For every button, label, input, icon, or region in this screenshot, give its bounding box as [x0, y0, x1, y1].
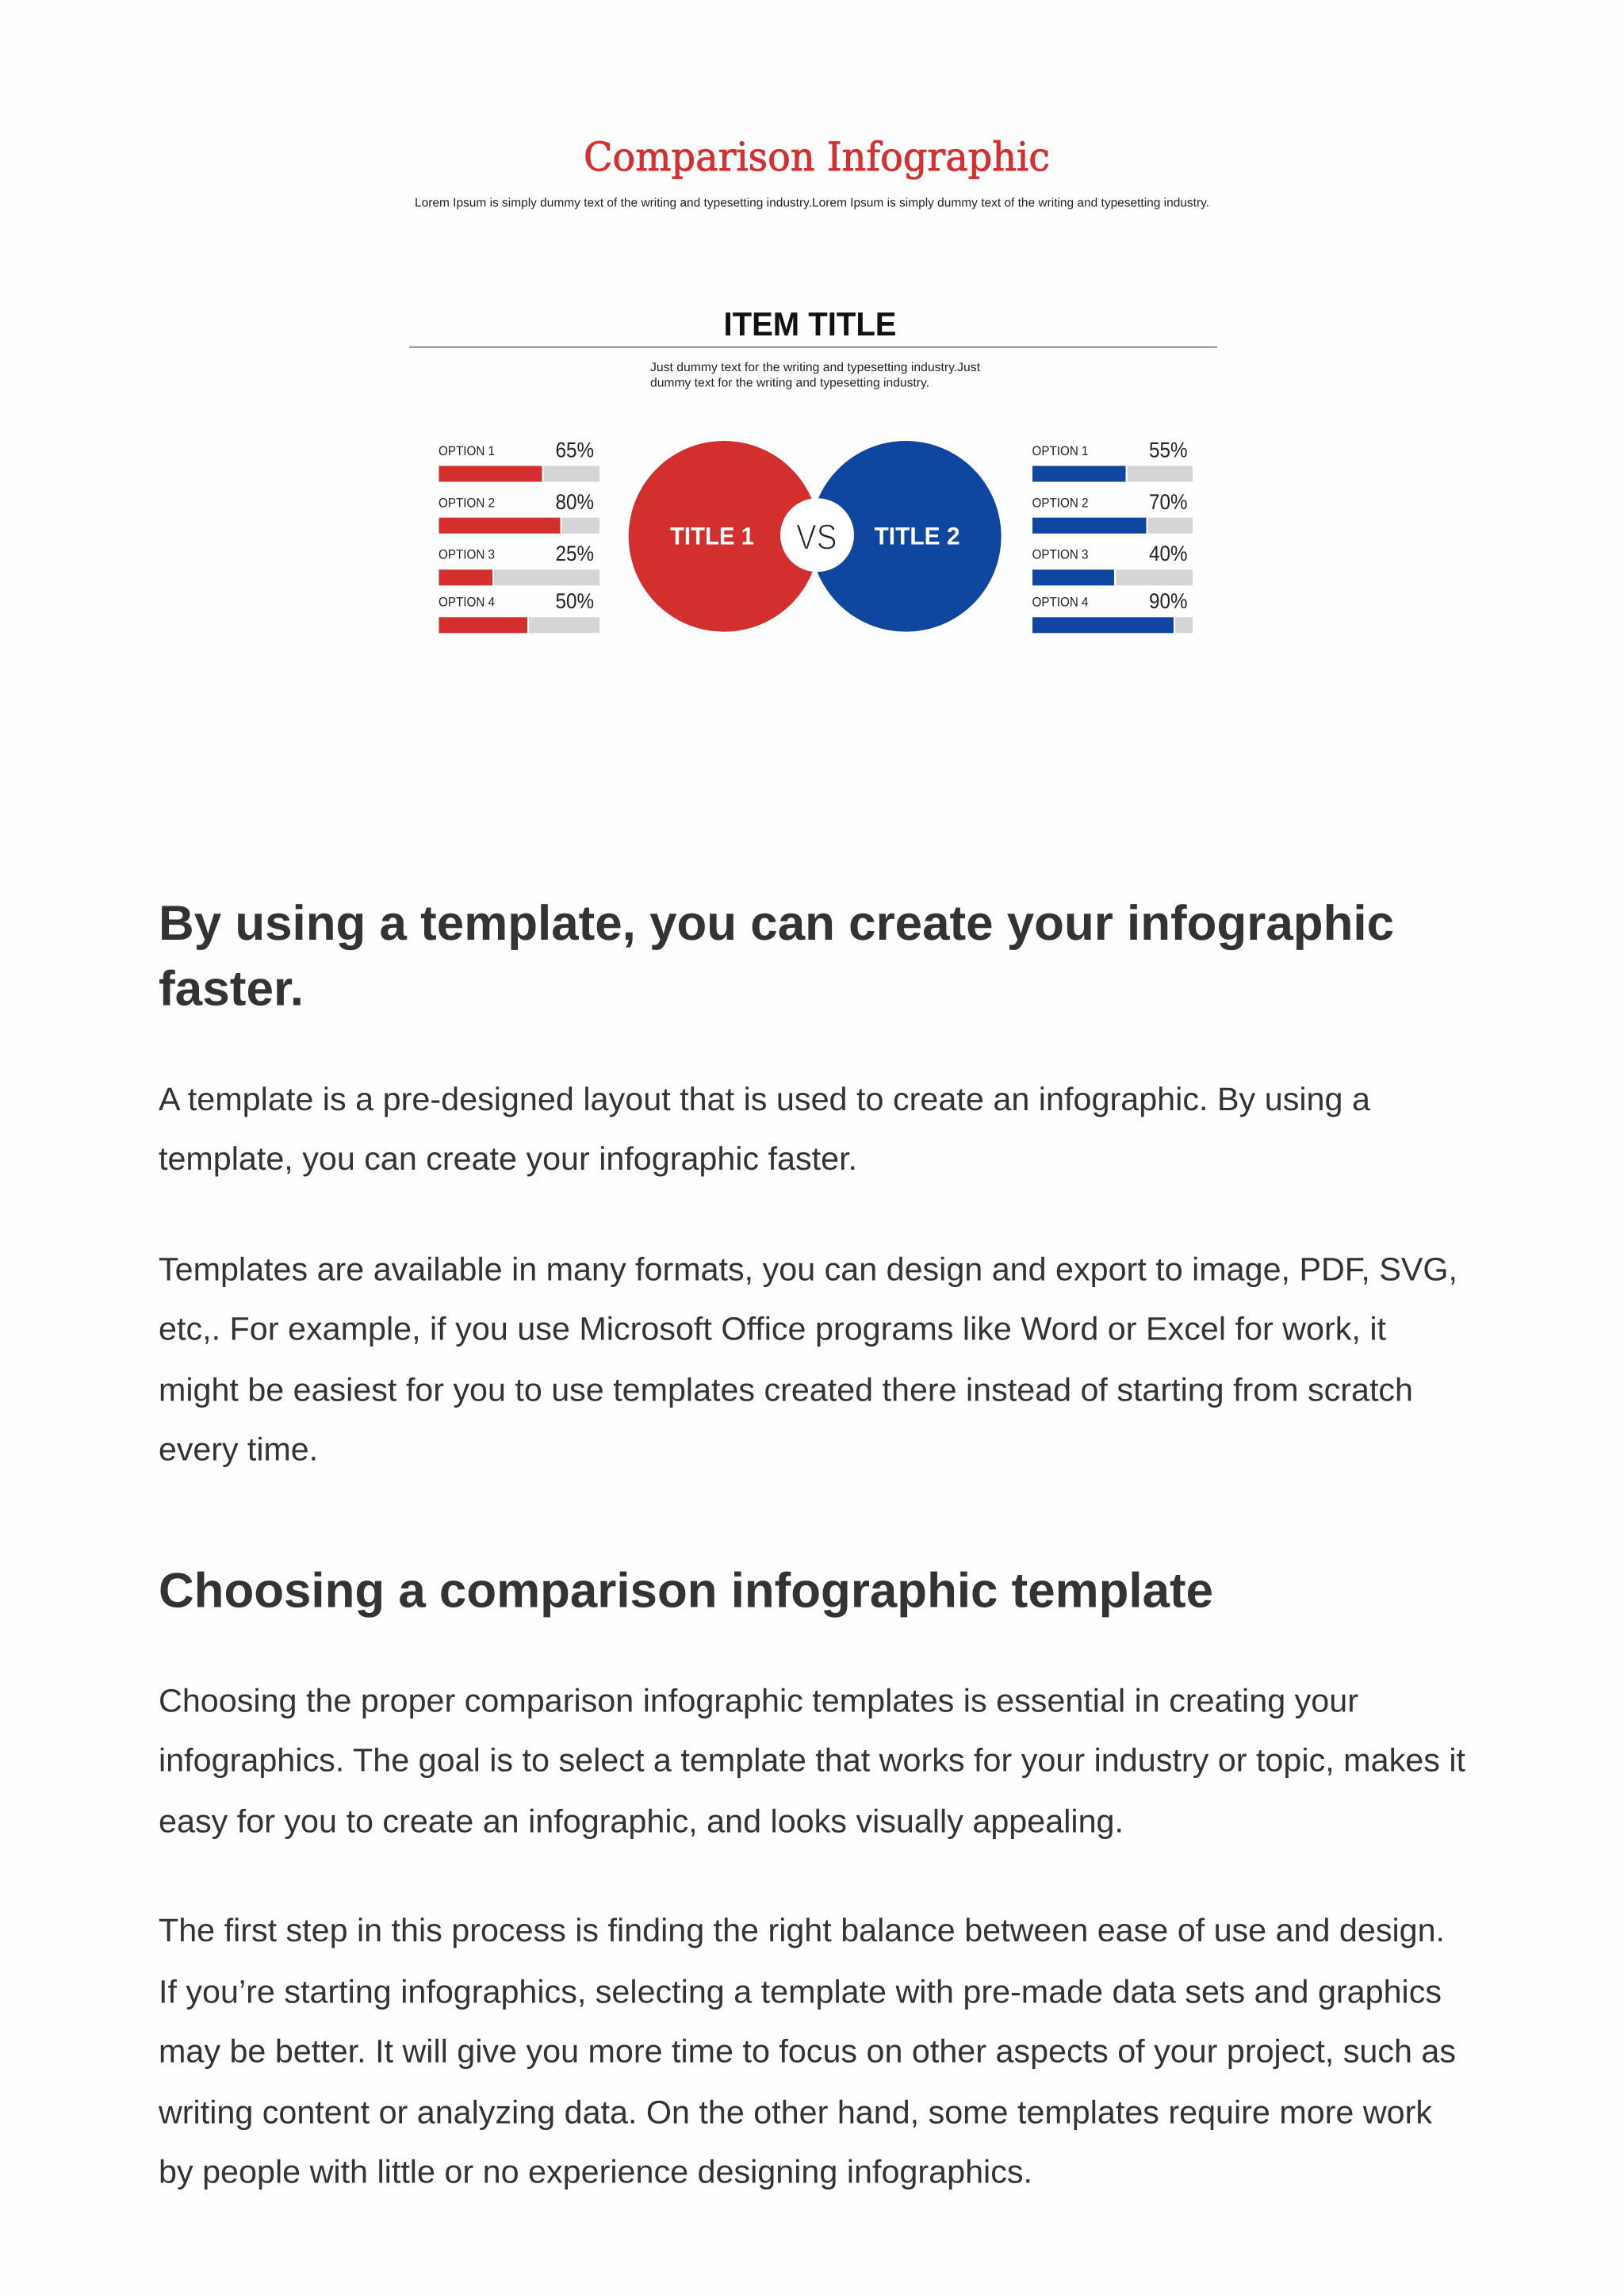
blue circle — [810, 441, 1002, 632]
right option 4: OPTION 4 — [1032, 596, 1088, 610]
paragraph: first step: If you’re starting infographics, selecting a template with pre-made data sets and graphics — [159, 1974, 1442, 2010]
right option 3 — [1032, 542, 1193, 585]
item title rule — [409, 346, 1217, 348]
paragraph: template formats: Templates are available in many formats, you can design and export to image, PDF, SVG, — [159, 1251, 1457, 1287]
right option 4 — [1032, 589, 1193, 633]
left option 3 — [439, 542, 599, 585]
right option 2: 70% — [1149, 490, 1188, 514]
paragraph: template formats: every time. — [159, 1431, 318, 1468]
right option 2 — [1032, 490, 1193, 534]
left option 4: 50% — [555, 589, 594, 613]
right option 1: 55% — [1149, 438, 1188, 462]
infographic subtitle: Lorem Ipsum is simply dummy text of the writing and typesetting industry.Lorem Ipsum is simply dummy text of the writing and typesetting industry. — [415, 197, 1209, 209]
left option 1: 65% — [555, 438, 594, 462]
paragraph: template definition: A template is a pre-designed layout that is used to create an infographic. By using a — [159, 1081, 1370, 1117]
paragraph: template formats — [159, 1251, 1457, 1468]
heading: by using a template: By using a template, you can create your infographic — [159, 896, 1394, 951]
left option bars — [439, 438, 599, 633]
paragraph: choosing templates — [159, 1682, 1466, 1840]
title 1 label: TITLE 1 — [670, 523, 754, 550]
paragraph: first step: may be better. It will give you more time to focus on other aspects of your project, such as — [159, 2033, 1456, 2070]
right option 2: OPTION 2 — [1032, 496, 1088, 510]
left option 4: OPTION 4 — [439, 596, 495, 610]
infographic title: Comparison Infographic — [584, 134, 1050, 180]
right option 1: OPTION 1 — [1032, 444, 1088, 458]
left option 1: OPTION 1 — [439, 444, 495, 458]
left option 1 — [439, 438, 599, 482]
right option 3: 40% — [1149, 542, 1188, 565]
left option 2 — [439, 490, 599, 534]
paragraph: first step: by people with little or no experience designing infographics. — [159, 2153, 1032, 2190]
left option 3: OPTION 3 — [439, 548, 495, 562]
paragraph: template formats: might be easiest for you to use templates created there instead of starting from scratch — [159, 1372, 1413, 1408]
heading: choosing a template: Choosing a comparison infographic template — [159, 1564, 1213, 1619]
paragraph: template definition: template, you can create your infographic faster. — [159, 1140, 857, 1177]
infographic panel — [409, 134, 1217, 633]
right option 1 — [1032, 438, 1193, 482]
paragraph: template formats: etc,. For example, if you use Microsoft Office programs like Word or Excel for work, it — [159, 1310, 1387, 1347]
white VS circle — [780, 498, 854, 572]
versus circles — [629, 441, 1002, 632]
paragraph: first step: writing content or analyzing data. On the other hand, some templates require more work — [158, 2094, 1432, 2130]
left option 2: 80% — [555, 490, 594, 514]
heading: by using a template — [159, 896, 1394, 1017]
red circle — [629, 441, 819, 632]
item description: Just dummy text for the writing and typesetting industry.Just — [650, 361, 981, 374]
item description: dummy text for the writing and typesetting industry. — [650, 376, 929, 390]
paragraph: choosing templates: infographics. The goal is to select a template that works for your industry or topic, makes it — [159, 1741, 1466, 1778]
VS label: VS — [796, 517, 837, 557]
left option 3: 25% — [555, 542, 594, 565]
paragraph: first step — [158, 1912, 1456, 2190]
heading: by using a template: faster. — [159, 962, 304, 1017]
left option 4 — [439, 589, 599, 633]
left option 2: OPTION 2 — [439, 496, 495, 510]
paragraph: first step: The first step in this process is finding the right balance between ease of use and design. — [159, 1912, 1445, 1948]
right option 4: 90% — [1149, 589, 1188, 613]
right option 3: OPTION 3 — [1032, 548, 1088, 562]
title 2 label: TITLE 2 — [874, 523, 959, 550]
paragraph: choosing templates: easy for you to create an infographic, and looks visually appealing. — [159, 1803, 1124, 1840]
right option bars — [1032, 438, 1193, 633]
item description — [650, 361, 981, 390]
paragraph: choosing templates: Choosing the proper comparison infographic templates is essential in creating your — [159, 1682, 1358, 1718]
item title: ITEM TITLE — [723, 305, 896, 343]
paragraph: template definition — [159, 1081, 1370, 1177]
